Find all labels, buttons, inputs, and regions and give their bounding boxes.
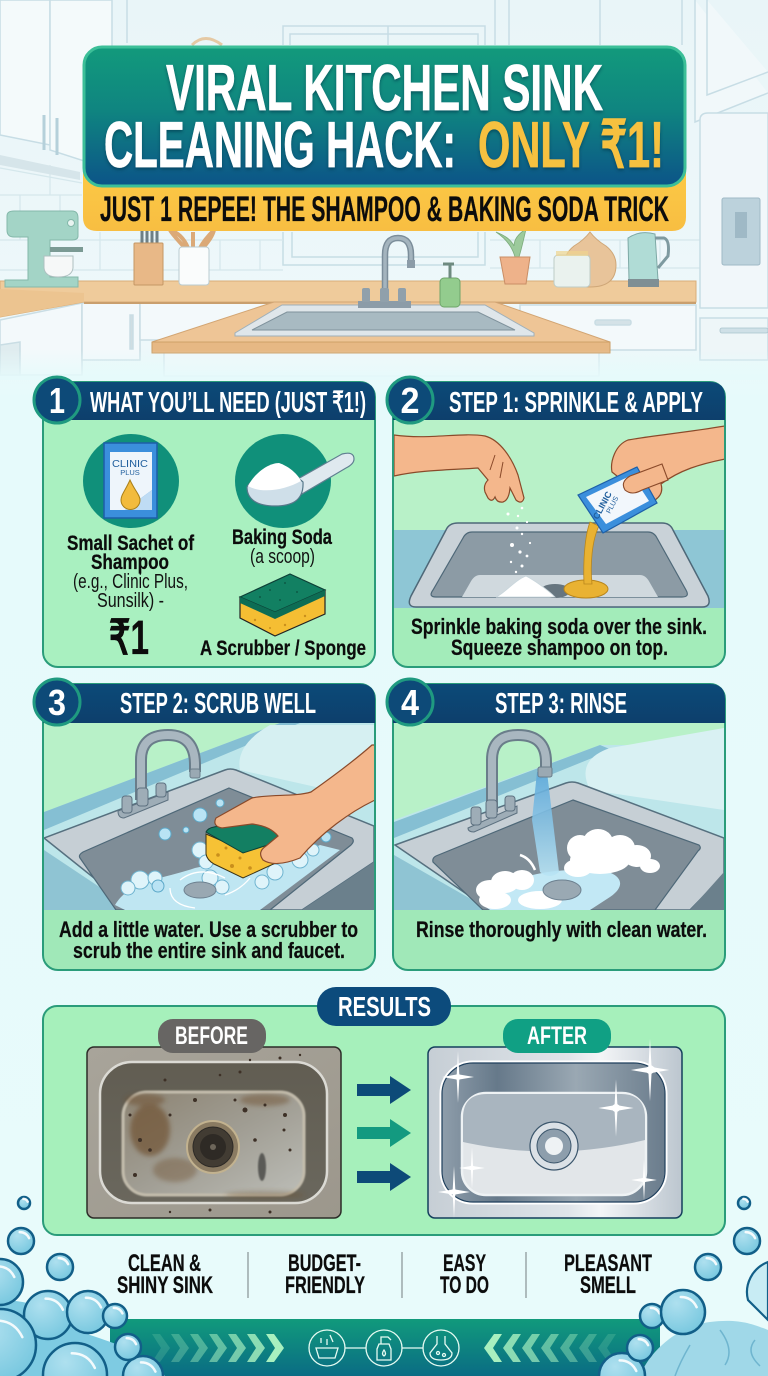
sponge label: A Scrubber / Sponge xyxy=(200,637,366,660)
results panel xyxy=(43,987,725,1235)
results pill xyxy=(317,987,451,1026)
fade xyxy=(0,350,768,380)
header: STEP 3: RINSE xyxy=(495,688,627,720)
icon: sponge xyxy=(240,574,325,636)
benefit: budget friendly: BUDGET- xyxy=(288,1250,361,1277)
illustration: hands over sink: CLINIC xyxy=(591,489,614,521)
number badge 3 xyxy=(34,679,80,725)
results pill: RESULTS xyxy=(338,991,431,1022)
caption xyxy=(411,614,707,660)
header xyxy=(393,382,725,420)
caption: Add a little water. Use a scrubber to xyxy=(59,917,358,942)
benefit: budget friendly xyxy=(285,1250,365,1299)
icon: flask with bubbles xyxy=(423,1330,459,1366)
icon: shampoo sachet xyxy=(83,434,179,528)
icon: baking soda scoop xyxy=(235,434,354,528)
baking soda label xyxy=(232,526,332,568)
caption: Rinse thoroughly with clean water. xyxy=(416,917,707,942)
sachet label: (e.g., Clinic Plus, xyxy=(73,571,188,593)
number badge 4 xyxy=(387,679,433,725)
plant xyxy=(496,229,530,284)
header xyxy=(43,382,375,420)
arrows xyxy=(357,1076,411,1191)
before sink photo xyxy=(87,1047,341,1218)
faucet xyxy=(358,238,415,308)
right bubbles and foam xyxy=(599,1197,768,1376)
header: WHAT YOU’LL NEED (JUST ₹1!) xyxy=(90,387,366,419)
header: STEP 2: SCRUB WELL xyxy=(120,688,316,720)
benefit: easy to do: TO DO xyxy=(440,1272,489,1299)
panel 1: what you'll need xyxy=(34,377,375,667)
benefit: clean and shiny: CLEAN & xyxy=(128,1250,201,1277)
jar xyxy=(554,251,590,287)
fridge xyxy=(700,113,768,360)
lower cabinets xyxy=(0,303,696,375)
benefit: clean and shiny xyxy=(117,1250,213,1299)
subtitle ribbon xyxy=(83,170,686,231)
baking soda label: Baking Soda xyxy=(232,526,332,549)
sachet label: Small Sachet of xyxy=(67,532,195,555)
title banner xyxy=(83,47,686,231)
after pill xyxy=(503,1019,611,1053)
panel 4: rinse xyxy=(387,679,725,970)
panel 3: scrub well xyxy=(34,679,375,970)
illustration: hands over sink: PLUS xyxy=(606,495,621,515)
kettle xyxy=(628,233,668,287)
island with sink xyxy=(152,302,610,376)
benefit: clean and shiny: SHINY SINK xyxy=(117,1272,213,1299)
caption xyxy=(59,917,358,963)
title panel xyxy=(84,47,685,186)
icon: spray bottle xyxy=(366,1330,402,1366)
illustration: hands over sink xyxy=(394,420,725,608)
icon: shampoo sachet: PLUS xyxy=(120,468,140,477)
title panel: CLEANING HACK: xyxy=(104,108,456,181)
illustration: water rinsing sink xyxy=(394,723,724,910)
backsplash tiles xyxy=(0,165,700,280)
chevrons right xyxy=(484,1334,616,1362)
kitchen illustration xyxy=(0,0,768,380)
benefit: pleasant smell: SMELL xyxy=(580,1272,636,1299)
coffee maker xyxy=(5,211,83,287)
price: ₹1 xyxy=(109,612,149,665)
cutting board xyxy=(564,232,616,287)
number badge 1: 1 xyxy=(49,380,65,421)
title panel: ONLY ₹1! xyxy=(478,108,664,181)
benefits row xyxy=(117,1250,652,1299)
illustration: hand scrubbing sink xyxy=(44,723,375,910)
benefit: budget friendly: FRIENDLY xyxy=(285,1272,365,1299)
baking soda label: (a scoop) xyxy=(250,546,315,568)
number badge 3: 3 xyxy=(48,682,66,723)
chevrons left xyxy=(152,1334,284,1362)
caption: Squeeze shampoo on top. xyxy=(451,635,668,660)
header xyxy=(43,684,375,723)
header xyxy=(393,684,725,723)
benefit: pleasant smell xyxy=(564,1250,652,1299)
benefit: easy to do: EASY xyxy=(443,1250,486,1277)
soap bottle xyxy=(440,264,460,307)
footer bar xyxy=(110,1319,660,1376)
left bubbles and foam xyxy=(0,1197,165,1376)
benefit: pleasant smell: PLEASANT xyxy=(564,1250,652,1277)
caption: scrub the entire sink and faucet. xyxy=(73,938,345,963)
sachet label xyxy=(67,532,195,612)
sachet label: Sunsilk) - xyxy=(97,590,164,612)
back counter xyxy=(0,281,696,317)
before pill: BEFORE xyxy=(175,1022,248,1050)
number badge 1 xyxy=(34,377,80,423)
sachet label: Shampoo xyxy=(91,551,169,574)
upper cabinets and window xyxy=(0,0,768,265)
icon: sink xyxy=(309,1330,345,1366)
number badge 4: 4 xyxy=(401,682,419,723)
after sink photo xyxy=(428,1039,682,1218)
utensil crock xyxy=(134,230,214,285)
panel 2: sprinkle and apply xyxy=(387,377,725,667)
after pill: AFTER xyxy=(527,1022,587,1050)
before pill xyxy=(158,1019,266,1053)
number badge 2: 2 xyxy=(400,380,420,421)
number badge 2 xyxy=(387,377,433,423)
footer icons xyxy=(309,1330,459,1366)
benefit: easy to do xyxy=(440,1250,489,1299)
icon: shampoo sachet: CLINIC xyxy=(112,459,148,470)
